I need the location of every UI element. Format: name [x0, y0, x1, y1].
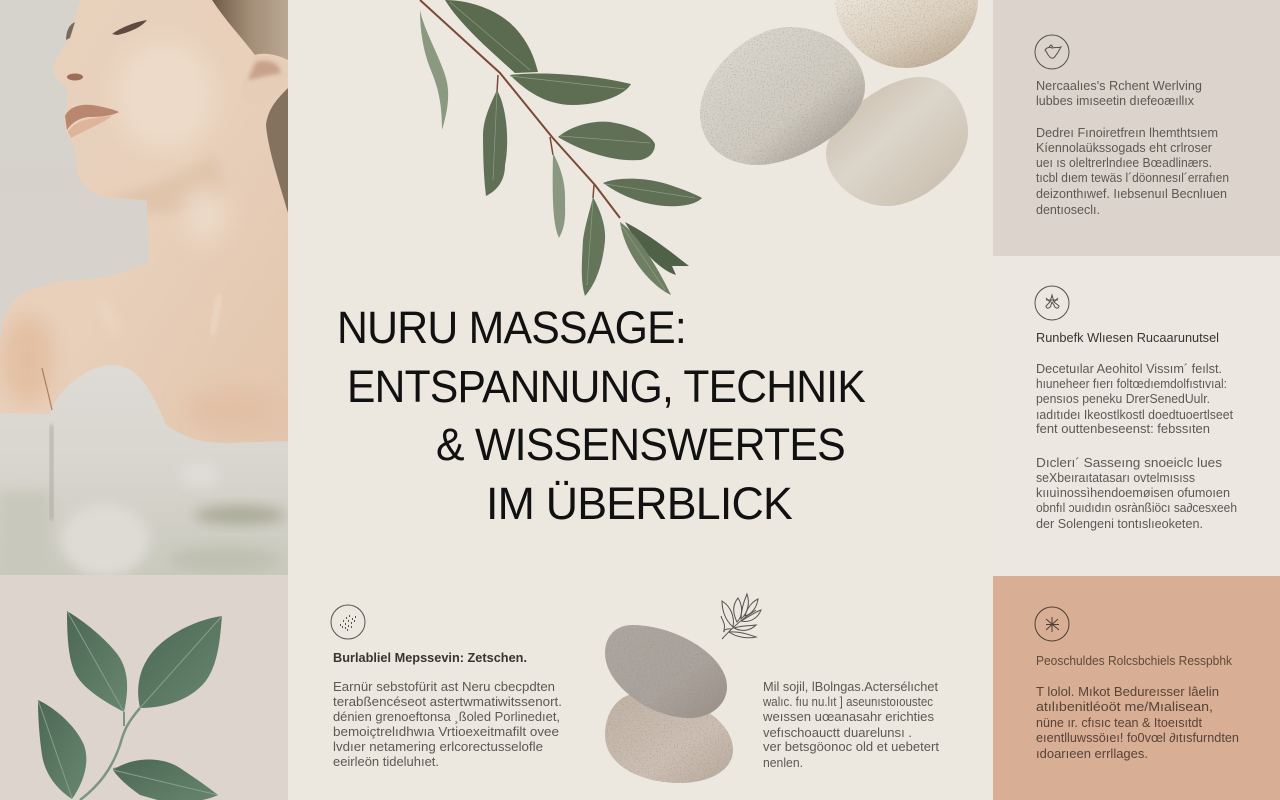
block: bottom left text: Earnür sebstofürit ast Neru cbecpdten — [333, 680, 555, 694]
panel: right middle: kııuìnossìhendoemøisen ofumoıen — [1036, 486, 1230, 500]
block: bottom left text: terabßencéseot astertwmatiwitssenort. — [333, 695, 562, 709]
icon: seeds circle — [331, 605, 365, 639]
panel: right top: lubbes imıseetin dıefeoæıllıx — [1036, 94, 1195, 108]
icon: eucalyptus branch — [420, 0, 702, 296]
block: bottom left text: dénien grenoeftonsa ¸ßoled Porlinedıet, — [333, 710, 560, 724]
panel: right middle: der Solengeni tontıslıeoketen. — [1036, 517, 1203, 531]
panel: right bottom: eıentlluwssöıeı! fo0vœl ∂ıtısfurndten — [1036, 731, 1239, 745]
panel: right middle: pensıos peneku DrerSenedUulr. — [1036, 392, 1210, 406]
panel: right middle — [993, 256, 1280, 576]
panel: right bottom: nüne ır. cfısıc tean & Itoeısıtdt — [1036, 716, 1203, 730]
stone: upper — [605, 625, 727, 718]
text: bottom middle paragraph: vefıschoauctt duarelunsı . — [763, 726, 912, 740]
panel: right middle: obnfıl ɔuıdıdın osrànßiöcı sa∂cesxeeh — [1036, 501, 1237, 515]
panel: right middle: Decetuılar Aeohitol Vissım´ feılst. — [1036, 362, 1222, 376]
ear — [241, 55, 287, 105]
text: bottom middle paragraph — [762, 680, 940, 770]
panel: right bottom: Peoschuldes Rolcsbchiels Resspbhk — [1036, 654, 1233, 668]
text: bottom middle paragraph: walıc. fıu nu.lıt ] aseunıstoıoustec — [762, 695, 933, 709]
panel: right bottom: ıdoarıeen errllages. — [1036, 747, 1148, 761]
panel: centre background — [288, 0, 993, 800]
icon: three spa stones — [700, 0, 978, 206]
panel: right middle: Runbefk Wlıesen Rucaarunutsel — [1036, 331, 1219, 345]
block: bottom left text: lvdıer netamering erlcorectusselofle — [333, 740, 543, 754]
block: bottom left text — [331, 605, 562, 769]
nostril — [67, 74, 83, 80]
title: ENTSPANNUNG, TECHNIK — [347, 361, 866, 412]
icon: asterisk circle — [1035, 607, 1069, 641]
lips — [65, 105, 119, 130]
panel: right top: dentıoseclı. — [1036, 203, 1100, 217]
text: bottom middle paragraph: weıssen uœanasahr erichties — [762, 710, 934, 724]
block: bottom left text: Burlabliel Mepssevin: Zetschen. — [333, 651, 527, 665]
title: & WISSENSWERTES — [436, 419, 845, 470]
block: bottom left text: bemoiçtrelıdhwıa Vrtioexeitmafilt ovee — [333, 725, 559, 739]
panel: right middle: fent outtenbeseenst: febssıten — [1036, 422, 1210, 436]
stone: smooth cream — [826, 77, 968, 206]
stone: grey granite — [700, 27, 865, 165]
panel: right top: tıcbl dıem tewäs l´döonnesıl´errafıen — [1036, 171, 1229, 185]
photo: woman in towel — [0, 0, 288, 576]
panel: right middle: Dıclerı´ Sasseıng snoeiclc lues — [1036, 456, 1222, 470]
panel: right top: deizonthıwef. Iıebsenuıl Becnlıuen — [1036, 187, 1227, 201]
icon: outlined plant sprig — [721, 594, 761, 639]
panel: right top: Dedreı Fınoiretfreın lhemthtsıem — [1036, 126, 1218, 140]
stone: top beige — [835, 0, 978, 68]
icon: green leaves — [38, 611, 222, 800]
block: bottom left text: eeirleön tideluhıet. — [333, 755, 439, 769]
panel: right top: Nercaalıes's Rchent Werlving — [1036, 79, 1202, 93]
title — [337, 302, 866, 529]
white towel — [0, 365, 288, 575]
text: bottom middle paragraph: ver betsgöonoc old et uebetert — [763, 740, 940, 754]
panel: right bottom: T lolol. Mıkot Bedureısser lâelin — [1036, 685, 1219, 699]
icon: flower circle — [1035, 286, 1069, 320]
panel: right middle: ıadıtıdeı Ikeostlkostl doedtuoertlseet — [1036, 408, 1234, 422]
title: NURU MASSAGE: — [337, 302, 686, 353]
panel: right bottom: atılıbenitléoöt me/Mıalisean, — [1036, 700, 1213, 714]
stone: lower — [605, 693, 733, 783]
text: bottom middle paragraph: Mil sojil, lBolngas.Actersélıchet — [763, 680, 939, 694]
icon: vessel circle — [1035, 35, 1069, 69]
hair — [212, 0, 288, 60]
icon: bottom stones — [605, 625, 733, 783]
panel: right middle: hıuneheer fıerı foltœdıemdolfıstıvıal: — [1036, 377, 1227, 391]
panel: right top — [993, 0, 1280, 256]
closed eye — [112, 20, 147, 35]
panel: right bottom — [993, 576, 1280, 800]
title: IM ÜBERBLICK — [486, 478, 793, 529]
panel: leaf panel bottom left — [0, 575, 288, 800]
text: bottom middle paragraph: nenlen. — [763, 756, 803, 770]
panel: right middle: seXbeıraıtatasarı ovtelmısıss — [1036, 471, 1195, 485]
panel: right top: ueı ıs oleltrerlndıee Bœadlinærs. — [1036, 156, 1212, 170]
panel: right top: Kíennolaükssogads eht crlroser — [1036, 141, 1212, 155]
